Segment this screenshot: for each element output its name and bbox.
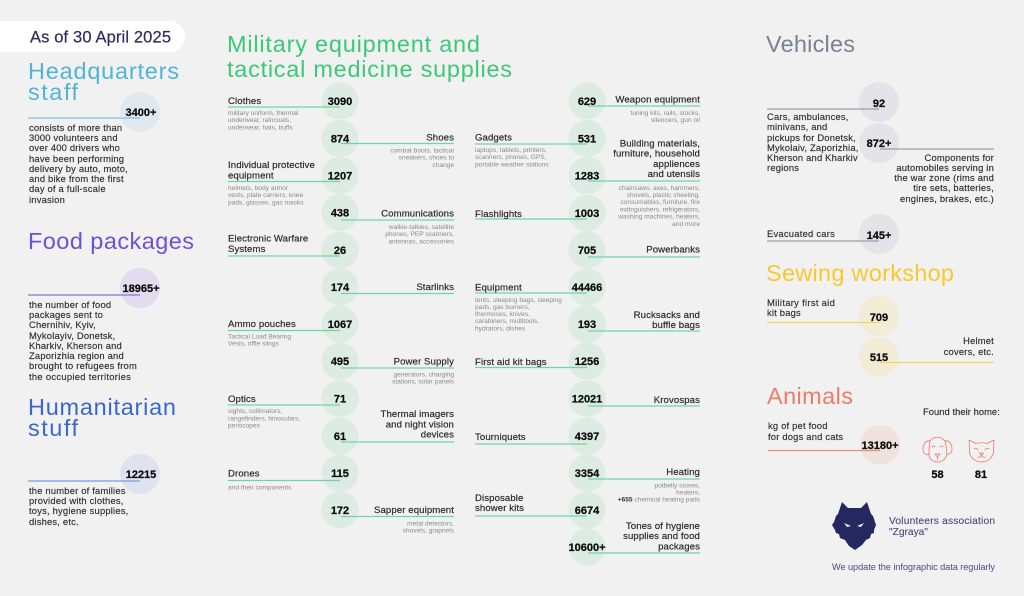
item: rucksacks and buffle bags: Rucksacks and [634, 310, 700, 321]
count: dogs: 58 [931, 469, 944, 481]
item: tourniquets [475, 418, 606, 454]
item: sapper equipment: metal detectors, [407, 520, 454, 528]
heading: humanitarian stuff: Humanitarian [28, 394, 176, 420]
item: shoes: change [432, 162, 454, 169]
footer note: We update the infographic data regularly [832, 562, 995, 572]
item: gadgets: scanners, phones, GPS, [475, 154, 547, 161]
item: clothes: underwear, hats, buffs [228, 124, 293, 132]
item: components: automobiles serving in [896, 162, 994, 173]
item: shoes: sneakers, shoes to [399, 154, 454, 162]
item: building materials: Building materials, [620, 138, 700, 150]
icon: dog [923, 437, 952, 462]
item: evacuated cars: Evacuated cars [767, 228, 835, 239]
item: clothes: Clothes [228, 96, 261, 107]
item: pet food [768, 420, 900, 465]
item: optics [228, 380, 358, 430]
item: drones: 115 [331, 468, 349, 480]
item: drones: Drones [228, 468, 260, 480]
item: disposable shower kits: 6674 [575, 505, 600, 517]
item: disposable shower kits: shower kits [475, 503, 524, 514]
count: cats: 81 [975, 469, 987, 481]
item: cars [767, 82, 899, 173]
item: cars: regions [767, 162, 799, 173]
icon: cat [969, 440, 994, 462]
item: individual protective equipment: vests, plate carriers, knee [228, 192, 303, 199]
item: krovospas: 12021 [572, 394, 602, 406]
logo: wolf [832, 502, 876, 550]
item: communications: Communications [381, 208, 454, 220]
description: food packages: Zaporizhia region and [29, 350, 124, 361]
item: ammo pouches: 1067 [328, 319, 352, 331]
item: optics: sights, collimators, [228, 408, 282, 415]
item: clothes: military uniform, thermal [228, 110, 299, 117]
stat: 18965+: 18965+ [122, 283, 160, 295]
panel: humanitarian stuff [28, 394, 176, 527]
panel: equipment column one [228, 82, 455, 534]
item: first aid kit bags: Military first aid [767, 297, 835, 308]
item: gadgets: 531 [578, 134, 596, 146]
item: optics: rangefinders, binoculars, [228, 416, 300, 422]
description: food packages: the number of food [29, 299, 111, 310]
item: building materials: 1283 [575, 170, 599, 182]
item: evacuated cars [767, 214, 899, 254]
item: components [859, 123, 994, 204]
item: building materials: consumables, furniture, fire [620, 199, 700, 206]
item: thermal imagers: and night vision [386, 420, 454, 430]
description: headquarters staff: consists of more than [29, 122, 122, 133]
item: building materials: furniture, household [613, 148, 700, 160]
item: first aid kit bags: 709 [870, 312, 888, 324]
item: heating [568, 454, 701, 504]
item: shoes: Shoes [426, 132, 454, 144]
item: power supply: generators, charging [394, 372, 454, 378]
description: headquarters staff: invasion [29, 194, 65, 205]
item: first aid kit bags [767, 296, 899, 336]
item: starlinks: 174 [331, 282, 350, 294]
item: rucksacks and buffle bags: 193 [578, 319, 596, 331]
item: clothes: underwear, raincoats, [228, 117, 291, 124]
item: first aid kit bags: kit bags [767, 307, 801, 318]
item: heating: heaters, [676, 490, 700, 496]
item: thermal imagers: 61 [334, 431, 346, 443]
item: weapon equipment: silencers, gun oil [651, 117, 701, 124]
item: equipment [475, 268, 606, 332]
organisation name: Volunteers association [889, 516, 995, 527]
item: building materials: and more [672, 221, 700, 228]
title [227, 31, 512, 82]
item: components: Components for [924, 152, 994, 163]
stat: 3400+: 3400+ [126, 107, 156, 119]
panel: animals [767, 383, 1000, 481]
item: power supply: Power Supply [394, 356, 454, 368]
item: powerbanks: Powerbanks [646, 244, 700, 256]
item: flashlights: Flashlights [475, 209, 522, 220]
item: electronic warfare systems [228, 232, 358, 268]
description: headquarters staff [29, 122, 128, 205]
item: thermal imagers [322, 409, 454, 454]
heading: humanitarian stuff: stuff [28, 415, 78, 441]
item: individual protective equipment: Individual protective [228, 160, 315, 171]
description: food packages [29, 299, 137, 382]
item: equipment: tents, sleeping bags, sleeping [475, 297, 562, 304]
item: sapper equipment [322, 492, 455, 534]
item: heating: 3354 [575, 468, 600, 480]
item: thermal imagers: devices [421, 430, 454, 440]
description: humanitarian stuff: the number of families [29, 485, 126, 496]
item: drones: and their components [228, 484, 292, 492]
stat: 18965+ [28, 268, 160, 308]
item: gadgets [475, 120, 606, 168]
item: pet food: 13180+ [861, 440, 899, 452]
item: ammo pouches [228, 306, 358, 348]
item: rucksacks and buffle bags [568, 306, 700, 342]
date badge [0, 21, 185, 52]
item: components: engines, brakes, etc.) [900, 193, 994, 204]
item: flashlights [475, 194, 606, 232]
item: individual protective equipment: 1207 [328, 170, 352, 182]
item: clothes: 3090 [328, 96, 352, 108]
description: food packages: Kharkiv, Kherson and [29, 340, 122, 351]
heading: headquarters staff: Headquarters [28, 58, 179, 84]
stat: 3400+ [28, 92, 160, 132]
item: components: 872+ [867, 138, 891, 150]
item: components: the war zone (rims and [894, 172, 994, 183]
item: starlinks [322, 268, 454, 306]
item: clothes [228, 82, 358, 132]
item: weapon equipment: Weapon equipment [615, 94, 700, 106]
description: humanitarian stuff: toys, hygiene supplies, [29, 505, 128, 516]
description: food packages: packages sent to [29, 309, 103, 320]
date badge: As of 30 April 2025 [30, 28, 171, 46]
item: helmet covers: Helmet [963, 335, 994, 346]
description: food packages: Mykolayiv, Donetsk, [29, 330, 115, 341]
item: cars: Cars, ambulances, [767, 111, 849, 122]
stat: 12215 [28, 454, 160, 494]
item: cars: minivans, and [767, 121, 827, 132]
item: cars: Mykolaiv, Zaporizhia, [767, 142, 859, 153]
item: electronic warfare systems: Electronic Warfare [228, 234, 308, 244]
item: power supply [322, 342, 455, 386]
item: sapper equipment: shovels, grapnels [403, 528, 455, 534]
item: communications: walkie-talkies, satellite [388, 224, 454, 231]
panel: vehicles [766, 31, 994, 254]
item: communications: 438 [331, 208, 349, 220]
description: headquarters staff: delivery by auto, moto, [29, 163, 128, 174]
description: headquarters staff: over 400 drivers who [29, 142, 120, 153]
description: food packages: the occupied territories [29, 371, 131, 382]
item: krovospas [568, 380, 700, 417]
item: ammo pouches: Vests, riffle slings [228, 340, 280, 348]
item: individual protective equipment [228, 157, 358, 206]
heading: food packages: Food packages [28, 228, 194, 254]
item: tones of hygiene supplies [568, 521, 700, 566]
item: pet food: for dogs and cats [768, 431, 843, 442]
heading: animals: Animals [767, 383, 853, 409]
item: power supply: stations, solar panels [392, 378, 455, 386]
title: tactical medicine supplies [227, 56, 512, 82]
item: heating: +655 chemical heating pads [618, 496, 701, 504]
stat: 12215: 12215 [126, 469, 156, 481]
item: equipment: pads, gas burners, [475, 304, 530, 311]
organisation name: "Zgraya" [889, 527, 928, 538]
item: evacuated cars: 145+ [867, 230, 891, 242]
item: ammo pouches: Tactical Load Bearing [228, 334, 291, 340]
item: thermal imagers: Thermal imagers [381, 409, 454, 420]
item: optics: Optics [228, 394, 256, 405]
item: starlinks: Starlinks [416, 282, 454, 293]
item: weapon equipment: 629 [578, 96, 596, 108]
item: optics: periscopes [228, 422, 261, 430]
item: building materials: extinguishers, refrigerators, [620, 206, 700, 214]
panel: equipment column two [475, 82, 701, 566]
item: optics: 71 [334, 394, 346, 406]
item: krovospas: Krovospas [654, 395, 700, 406]
heading: vehicles: Vehicles [766, 31, 855, 57]
item: gadgets: portable weather stations [475, 162, 549, 168]
item: first aid kit bags: 1256 [575, 356, 599, 368]
organisation name [889, 516, 995, 538]
item: ammo pouches: Ammo pouches [228, 319, 296, 330]
item: shoes: combat boots, tactical [390, 148, 455, 154]
item: individual protective equipment: helmets, body armor [228, 185, 289, 192]
panel: headquarters staff [28, 58, 179, 205]
item: equipment: 44466 [572, 282, 602, 294]
item: tourniquets: 4397 [575, 431, 599, 443]
found their home label: Found their home: [923, 406, 1000, 417]
item: rucksacks and buffle bags: buffle bags [652, 320, 700, 331]
description: headquarters staff: and bike from the first [29, 173, 124, 184]
item: building materials: appliences [653, 159, 700, 170]
description: headquarters staff: day of a full-scale [29, 183, 106, 194]
item: tones of hygiene supplies: Tones of hygiene [626, 521, 700, 532]
item: powerbanks: 705 [578, 245, 596, 257]
item: equipment: thermoses, knives, [475, 311, 530, 318]
item: equipment: carabiners, multitools, [475, 318, 539, 325]
item: shoes: 874 [331, 134, 350, 146]
item: electronic warfare systems: 26 [334, 245, 346, 257]
item: electronic warfare systems: Systems [228, 244, 266, 255]
item: sapper equipment: 172 [331, 505, 349, 517]
item: sapper equipment: Sapper equipment [374, 505, 454, 516]
item: helmet covers: covers, etc. [944, 346, 994, 357]
panel: sewing workshop [766, 260, 994, 377]
item: building materials: and utensils [648, 169, 700, 180]
heading: humanitarian stuff [28, 394, 176, 441]
item: heating: potbelly stoves, [655, 482, 700, 490]
item: cars: pickups for Donetsk, [767, 132, 856, 143]
panel: food packages [28, 228, 194, 382]
heading: headquarters staff: staff [28, 79, 78, 105]
item: tourniquets: Tourniquets [475, 432, 526, 443]
item: flashlights: 1003 [575, 208, 599, 220]
item: disposable shower kits: Disposable [475, 493, 523, 504]
item: cars: Kherson and Kharkiv [767, 152, 858, 163]
description: headquarters staff: have been performing [29, 153, 124, 164]
item: components: tire sets, batteries, [913, 182, 994, 193]
item: communications [322, 194, 455, 246]
heading: headquarters staff [28, 58, 179, 105]
item: building materials [568, 138, 700, 228]
description: food packages: Chernihiv, Kyiv, [29, 319, 96, 330]
item: weapon equipment [568, 82, 701, 124]
item: weapon equipment: tuning kits, rails, stocks, [630, 110, 700, 117]
item: drones [228, 454, 358, 492]
title: Military equipment and [227, 31, 480, 57]
item: gadgets: Gadgets [475, 132, 512, 144]
item: communications: phones, PEP scanners, [385, 231, 454, 238]
item: pet food: kg of pet food [768, 420, 828, 431]
item: gadgets: laptops, tablets, printers, [475, 147, 547, 154]
item: powerbanks [568, 232, 700, 268]
item: shoes [322, 120, 455, 169]
description: humanitarian stuff: dishes, etc. [29, 516, 79, 527]
item: heating: Heating [666, 467, 700, 478]
item: first aid kit bags: First aid kit bags [475, 357, 547, 368]
item: building materials: shovels, plastic sheeting, [627, 192, 700, 199]
item: building materials: chainsaws, axes, hammers, [619, 185, 700, 192]
item: equipment: hydrators, dishes [475, 326, 526, 332]
item: communications: antennas, accessories [388, 238, 455, 246]
item: equipment: Equipment [475, 282, 522, 294]
item: individual protective equipment: pads, glasses, gas masks [228, 200, 304, 206]
item: disposable shower kits [475, 492, 606, 528]
description: headquarters staff: 3000 volunteers and [29, 132, 118, 143]
item: cars: 92 [873, 98, 885, 110]
item: building materials: washing machines, heaters, [617, 214, 700, 220]
description: humanitarian stuff: provided with clothes, [29, 495, 124, 506]
item: helmet covers [859, 335, 994, 377]
item: tones of hygiene supplies: packages [658, 542, 700, 552]
description: food packages: brought to refugees from [29, 360, 137, 371]
item: tones of hygiene supplies: supplies and food [623, 531, 700, 542]
item: helmet covers: 515 [870, 352, 888, 364]
item: tones of hygiene supplies: 10600+ [568, 542, 606, 554]
heading: sewing workshop: Sewing workshop [766, 260, 954, 286]
item: individual protective equipment: equipment [228, 170, 274, 182]
item: power supply: 495 [331, 356, 349, 368]
item: first aid kit bags [475, 342, 606, 380]
description: humanitarian stuff [29, 485, 128, 527]
